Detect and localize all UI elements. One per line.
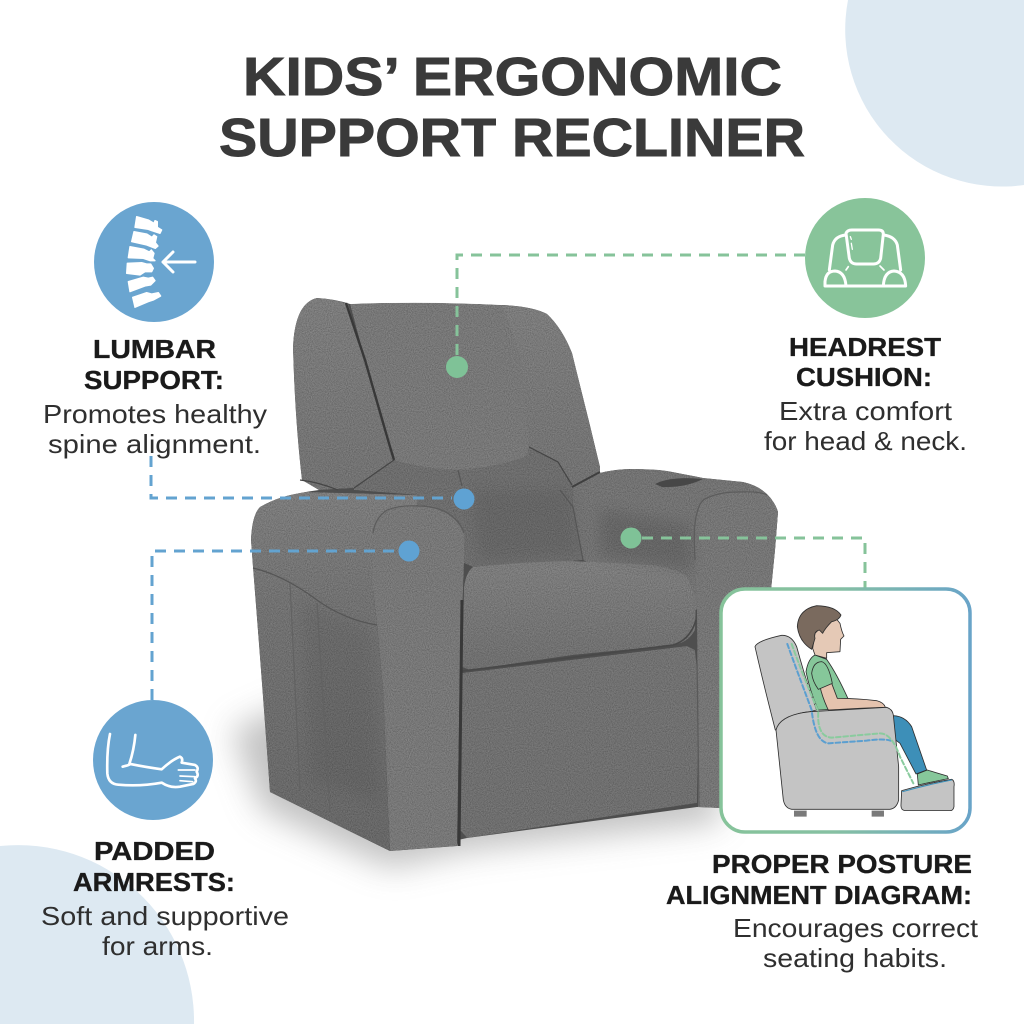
diagram: chair body xyxy=(776,707,899,809)
chair seams xyxy=(253,303,767,846)
diagram: leg xyxy=(893,716,927,774)
text: headrest cushion: HEADREST xyxy=(789,332,941,362)
text: headrest cushion: CUSHION: xyxy=(796,362,932,392)
right arm top xyxy=(572,469,778,610)
text: lumbar support: SUPPORT: xyxy=(84,365,224,395)
connector: headrest xyxy=(446,255,805,378)
cup holder xyxy=(655,478,703,487)
title: KIDS’ ERGONOMIC xyxy=(243,47,782,107)
diagram: chair feet xyxy=(794,811,884,817)
text: padded armrests: PADDED xyxy=(94,836,215,866)
text: headrest cushion: for head & neck. xyxy=(764,426,967,456)
text: headrest cushion: Extra comfort xyxy=(779,396,953,426)
text: lumbar support: spine alignment. xyxy=(48,429,261,459)
background circle: bottom left xyxy=(0,845,194,1024)
text: posture diagram: seating habits. xyxy=(763,943,947,973)
text: padded armrests: ARMRESTS: xyxy=(73,867,235,897)
text: padded armrests xyxy=(41,836,289,961)
left arm top band xyxy=(417,495,464,533)
background circle: top right xyxy=(845,0,1024,187)
text: padded armrests: Soft and supportive xyxy=(41,901,289,931)
diagram: foot rest xyxy=(901,779,954,811)
left arm front xyxy=(373,506,464,851)
connector: lumbar xyxy=(151,456,474,510)
front lower panel xyxy=(460,646,699,838)
connector: armrest xyxy=(152,540,420,700)
lumbar back xyxy=(354,447,583,567)
right wing xyxy=(501,305,600,487)
diagram: sleeve xyxy=(812,662,832,689)
text: lumbar support xyxy=(43,334,267,459)
seat cushion xyxy=(462,561,696,670)
connector: posture diagram xyxy=(620,528,865,588)
diagram: arm xyxy=(820,683,885,710)
diagram: shoe xyxy=(917,770,948,785)
title: SUPPORT RECLINER xyxy=(219,108,805,168)
text: posture diagram: Encourages correct xyxy=(733,913,979,943)
text: headrest cushion xyxy=(764,332,967,456)
headrest cushion xyxy=(350,303,529,470)
chair shading xyxy=(300,490,692,800)
text: posture diagram: PROPER POSTURE xyxy=(712,849,972,879)
text: lumbar support: LUMBAR xyxy=(93,334,216,364)
text: posture diagram: ALIGNMENT DIAGRAM: xyxy=(666,880,972,910)
icon: lumbar spine xyxy=(94,202,214,322)
right arm front xyxy=(694,492,778,808)
recliner chair photo xyxy=(251,298,778,851)
title xyxy=(219,47,805,168)
chair shadow xyxy=(232,700,720,868)
diagram: head xyxy=(813,615,844,658)
icon: padded armrest xyxy=(93,700,213,820)
left wing xyxy=(293,298,394,490)
text: posture diagram xyxy=(666,849,979,973)
icon: headrest cushion xyxy=(805,198,925,318)
panel: posture diagram xyxy=(721,589,970,832)
diagram: chair back xyxy=(755,635,817,730)
left arm side xyxy=(251,492,417,851)
diagram: torso xyxy=(806,655,857,710)
text: lumbar support: Promotes healthy xyxy=(43,399,267,429)
text: padded armrests: for arms. xyxy=(102,931,213,961)
diagram: spine lines xyxy=(787,644,891,743)
chair silhouette xyxy=(251,298,778,851)
